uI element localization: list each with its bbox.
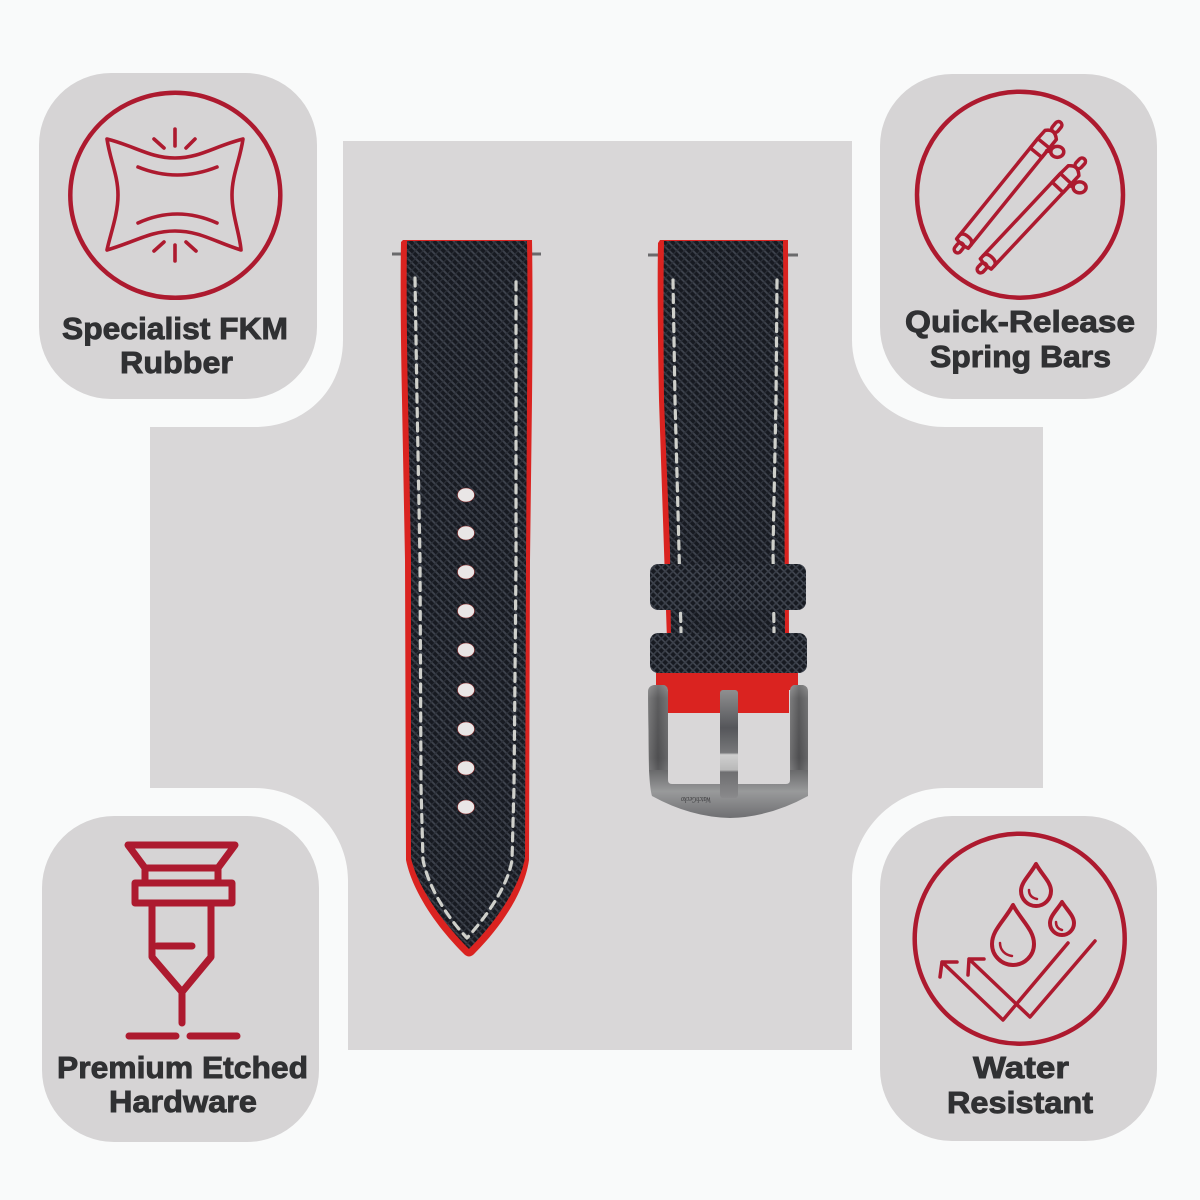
icon: spring bars	[917, 92, 1123, 298]
label: Specialist FKM Rubber: Rubber	[120, 345, 233, 380]
label: Water Resistant	[947, 1050, 1093, 1120]
spring bar pins, buckle piece	[648, 254, 798, 256]
label: Quick-Release Spring Bars	[905, 304, 1135, 374]
textured black surface, long piece	[407, 241, 528, 949]
panel: Water Resistant	[880, 816, 1157, 1141]
icon: stretching rubber	[70, 93, 280, 298]
strap loop upper	[650, 564, 806, 610]
label: Quick-Release Spring Bars: Spring Bars	[930, 339, 1111, 374]
spring bar pins, long piece	[392, 252, 541, 256]
label: Water Resistant: Water	[973, 1050, 1069, 1085]
background panel	[150, 141, 1043, 1050]
label: Specialist FKM Rubber: Specialist FKM	[62, 311, 288, 346]
strap loop lower	[650, 633, 807, 673]
watch strap: buckle piece	[648, 240, 808, 818]
label: Premium Etched Hardware: Hardware	[109, 1084, 257, 1119]
icon: water drops	[915, 834, 1125, 1044]
label: Premium Etched Hardware: Premium Etched	[57, 1050, 308, 1085]
panel: Specialist FKM Rubber	[39, 73, 317, 399]
panel: Premium Etched Hardware	[42, 816, 319, 1142]
label: Quick-Release Spring Bars: Quick-Release	[905, 304, 1135, 339]
metal buckle	[648, 685, 808, 818]
label: Specialist FKM Rubber	[62, 311, 288, 380]
stitching, buckle piece	[673, 280, 777, 632]
engraved logo: WatchGecko	[681, 795, 711, 804]
watch strap: long piece with holes	[392, 240, 541, 956]
textured black surface, buckle piece	[664, 241, 785, 640]
red rubber edge, buckle piece	[656, 240, 798, 713]
label: Premium Etched Hardware	[57, 1050, 308, 1119]
buckle tongue	[720, 690, 738, 798]
buckle holes	[458, 488, 474, 814]
label: Water Resistant: Resistant	[947, 1085, 1093, 1120]
stitching, long piece	[415, 278, 516, 938]
panel: Quick-Release Spring Bars	[880, 74, 1157, 399]
icon: etching laser	[128, 845, 237, 1036]
red rubber edge, long piece	[401, 240, 532, 956]
